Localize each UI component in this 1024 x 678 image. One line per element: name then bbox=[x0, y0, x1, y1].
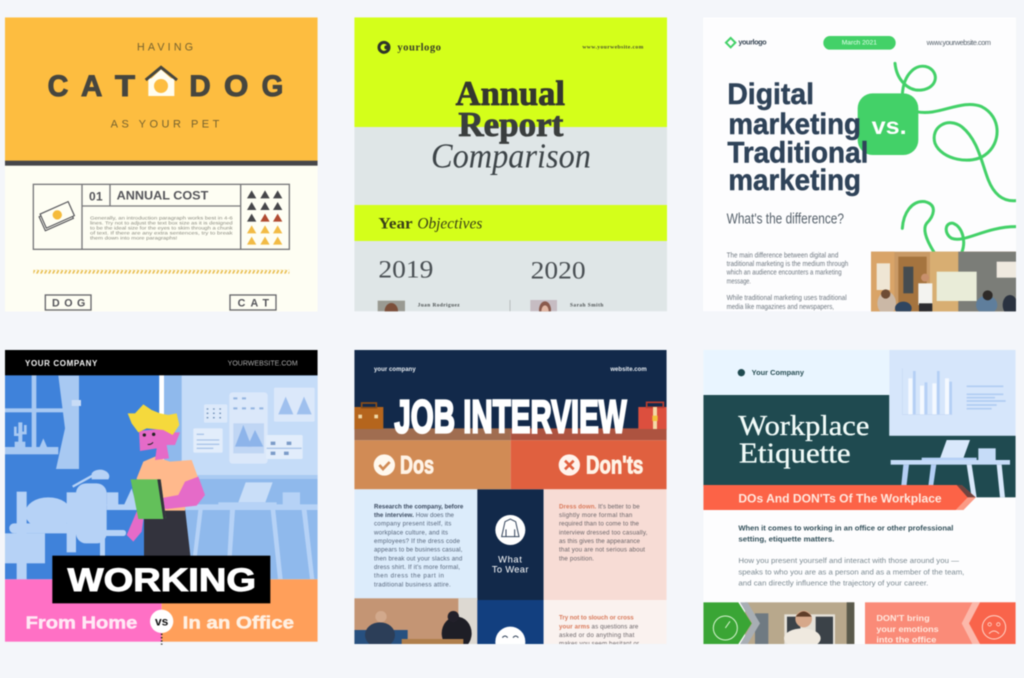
card paragraph: of text. If there are any extra sentences, try to break bbox=[90, 230, 233, 236]
card number: 01 bbox=[89, 189, 103, 203]
banner: DOs And DON'Ts Of The Workplace bbox=[738, 492, 942, 505]
title: marketing bbox=[728, 108, 861, 141]
emotion card: DON'T bring bbox=[876, 613, 930, 623]
column: dos text: employees? If the dress code bbox=[374, 538, 461, 545]
header labels bbox=[374, 367, 647, 373]
title: cat and dog bbox=[48, 74, 283, 98]
icon: red briefcase bbox=[638, 402, 667, 429]
footer: from home: From Home bbox=[26, 612, 137, 632]
kicker: having: HAVING bbox=[137, 42, 193, 54]
subtitle: as your pet: AS YOUR PET bbox=[111, 118, 220, 130]
column: what to wear: What bbox=[498, 554, 523, 564]
card paragraph: Generally, an introduction paragraph works best in 4-6 bbox=[90, 215, 233, 221]
section heading: Year bbox=[378, 216, 413, 233]
panel: digital vs traditional marketing bbox=[703, 17, 1017, 315]
icon: dog house bbox=[146, 67, 177, 96]
footer: from home bbox=[5, 579, 162, 642]
headline: working: WORKING bbox=[68, 561, 256, 598]
column: dos text: Research the company, before bbox=[374, 503, 464, 510]
date pill: March 2021 bbox=[842, 40, 877, 47]
headline: working bbox=[52, 556, 270, 603]
column: donts text: Dress down. It's better to be bbox=[559, 503, 640, 510]
header labels: website.com bbox=[609, 367, 647, 373]
column: what to wear: To Wear bbox=[492, 565, 529, 575]
header labels: your company bbox=[374, 367, 416, 373]
character bbox=[127, 404, 205, 558]
company name: Your Company bbox=[752, 370, 804, 377]
website: www.yourwebsite.com bbox=[926, 38, 991, 47]
section heading bbox=[378, 216, 482, 233]
lead text bbox=[738, 525, 953, 544]
decorative squiggles bbox=[895, 63, 1016, 253]
footer: in an office: In an Office bbox=[183, 612, 294, 632]
title: Digital bbox=[727, 78, 814, 111]
panel: working from home vs office bbox=[5, 350, 318, 645]
label: dog: DOG bbox=[52, 298, 85, 310]
body text: message. bbox=[727, 278, 751, 285]
card paragraph: to be the ideal size for the eyes to skim through a chunk bbox=[90, 225, 233, 231]
title: cat and dog: T bbox=[115, 70, 135, 103]
dos header bbox=[354, 440, 511, 489]
body text: The main difference between digital and bbox=[727, 252, 838, 259]
title: Report bbox=[458, 106, 564, 144]
body text bbox=[726, 252, 848, 311]
column: donts text: as this gives the appearance bbox=[559, 538, 641, 545]
column: donts text: the position. bbox=[559, 555, 594, 562]
title: cat and dog: G bbox=[262, 70, 283, 103]
label: cat: CAT bbox=[238, 298, 269, 310]
block: posture text: makes you seem hesitant or bbox=[559, 641, 639, 648]
column: donts text bbox=[544, 489, 667, 600]
emotion card: your emotions bbox=[876, 624, 939, 634]
photo: interview bbox=[354, 598, 477, 650]
body text: traditional marketing is the medium through bbox=[727, 261, 848, 268]
person: sarah: Sarah Smith bbox=[570, 303, 603, 309]
scene background bbox=[5, 375, 318, 579]
body text: and can directly influence the trajectory of your career. bbox=[738, 580, 928, 587]
column: dos text: the interview. How does the bbox=[374, 512, 455, 519]
window and curtain bbox=[5, 375, 81, 469]
column: donts text: interview dressed too casually, bbox=[559, 529, 648, 536]
person: juan bbox=[377, 300, 460, 312]
section heading: Objectives bbox=[417, 216, 482, 233]
header bar bbox=[5, 350, 318, 375]
label: dog bbox=[45, 295, 91, 310]
icon: brown briefcase bbox=[354, 403, 383, 429]
body text: media like magazines and newspapers, bbox=[727, 304, 834, 311]
column: donts text: slightly more formal than bbox=[559, 512, 633, 519]
vs badge: vs bbox=[155, 615, 169, 629]
vs badge bbox=[858, 93, 918, 155]
title: Etiquette bbox=[739, 438, 851, 469]
chair, lamp and sofa bbox=[5, 470, 137, 580]
block: smile icon bbox=[477, 600, 544, 657]
title: marketing bbox=[728, 164, 861, 197]
chart panel bbox=[889, 350, 1016, 436]
label: cat bbox=[230, 295, 276, 310]
block: posture text: asked or do anything that bbox=[559, 632, 635, 639]
column: dos text: then dress the part in bbox=[374, 573, 445, 580]
lead text: setting, etiquette matters. bbox=[738, 537, 834, 544]
body text: While traditional marketing uses traditional bbox=[727, 295, 847, 302]
date pill bbox=[823, 36, 896, 50]
body text: speaks to who you are as a person and as a member of the team, bbox=[738, 569, 964, 576]
desk and laptop bbox=[107, 482, 318, 579]
website: www.yourwebsite.com bbox=[582, 45, 644, 51]
header bar: YOURWEBSITE.COM bbox=[228, 361, 298, 368]
lead text: When it comes to working in an office or other professional bbox=[738, 525, 953, 532]
title: Comparison bbox=[431, 137, 591, 175]
title: cat and dog: C bbox=[48, 70, 68, 103]
person: sarah bbox=[530, 300, 604, 312]
title: JOB INTERVIEW bbox=[394, 390, 627, 442]
card heading: ANNUAL COST bbox=[117, 190, 208, 203]
column: dos text bbox=[354, 489, 477, 600]
card paragraph: lines. Try not to adjust the text box size as it is designed bbox=[90, 220, 233, 226]
panel: annual report comparison bbox=[354, 17, 667, 319]
header bar: YOUR COMPANY bbox=[25, 359, 98, 368]
wall dashboard cards bbox=[193, 388, 315, 464]
column: donts text: required than to come to the bbox=[559, 521, 640, 528]
vs badge: vs. bbox=[872, 113, 907, 139]
panel: cat vs dog annual cost bbox=[5, 17, 318, 312]
title: cat and dog: A bbox=[81, 70, 102, 103]
column: dos text: appears to be business casual, bbox=[374, 547, 463, 554]
donts header bbox=[511, 440, 667, 489]
logo bbox=[726, 38, 767, 47]
column: dos text: dress shirt. If it's more formal, bbox=[374, 564, 460, 571]
donts header: Don'ts bbox=[586, 451, 643, 479]
icon: banknotes bbox=[38, 202, 75, 231]
illustration: desk bbox=[891, 440, 1010, 498]
title bbox=[727, 78, 868, 197]
block: posture text: Try not to slouch or cross bbox=[559, 615, 634, 622]
logo: yourlogo bbox=[397, 43, 441, 54]
card paragraph: them down into more paragraphs! bbox=[90, 235, 177, 241]
cost card bbox=[33, 184, 289, 249]
column: what to wear bbox=[477, 489, 544, 600]
banner bbox=[703, 485, 976, 510]
year 2019: 2019 bbox=[378, 256, 433, 284]
dos header: Dos bbox=[400, 451, 434, 479]
panel: workplace etiquette bbox=[703, 350, 1016, 648]
title: Workplace bbox=[738, 411, 869, 442]
card paragraph bbox=[90, 215, 233, 241]
column: dos text: then break out your slacks and bbox=[374, 555, 463, 562]
column: dos text: workplace culture, and its bbox=[373, 529, 448, 536]
title bbox=[431, 75, 591, 175]
year 2020: 2020 bbox=[531, 257, 586, 285]
logo: yourlogo bbox=[738, 38, 767, 47]
emotion card bbox=[865, 602, 1016, 645]
title: cat and dog: D bbox=[189, 70, 211, 103]
title: cat and dog: O bbox=[224, 70, 248, 103]
block: posture text: your arms as questions are bbox=[559, 623, 639, 630]
logo bbox=[379, 42, 441, 54]
company name bbox=[738, 369, 804, 377]
emotion card: into the office bbox=[876, 635, 937, 645]
panel: job interview bbox=[354, 350, 667, 657]
photo card with clock bbox=[703, 602, 854, 648]
block: posture text bbox=[544, 600, 667, 648]
body text: which an audience encounters a marketing bbox=[726, 270, 842, 277]
title bbox=[738, 411, 869, 469]
vs badge bbox=[150, 610, 173, 645]
column: dos text: company present itself, its bbox=[374, 521, 451, 528]
triangle pictogram bbox=[247, 190, 282, 245]
person: juan: Juan Rodriguez bbox=[418, 303, 460, 309]
column: donts text: that you are not serious about bbox=[559, 547, 645, 554]
body text bbox=[738, 558, 964, 587]
column: dos text: traditional business attire. bbox=[374, 581, 451, 588]
footer: in an office bbox=[162, 579, 318, 642]
subtitle: What's the difference? bbox=[727, 211, 844, 227]
photo: office meeting bbox=[871, 252, 1017, 315]
body text: How you present yourself and interact with those around you — bbox=[738, 558, 959, 565]
title: Annual bbox=[456, 75, 565, 113]
title: Traditional bbox=[727, 137, 868, 170]
